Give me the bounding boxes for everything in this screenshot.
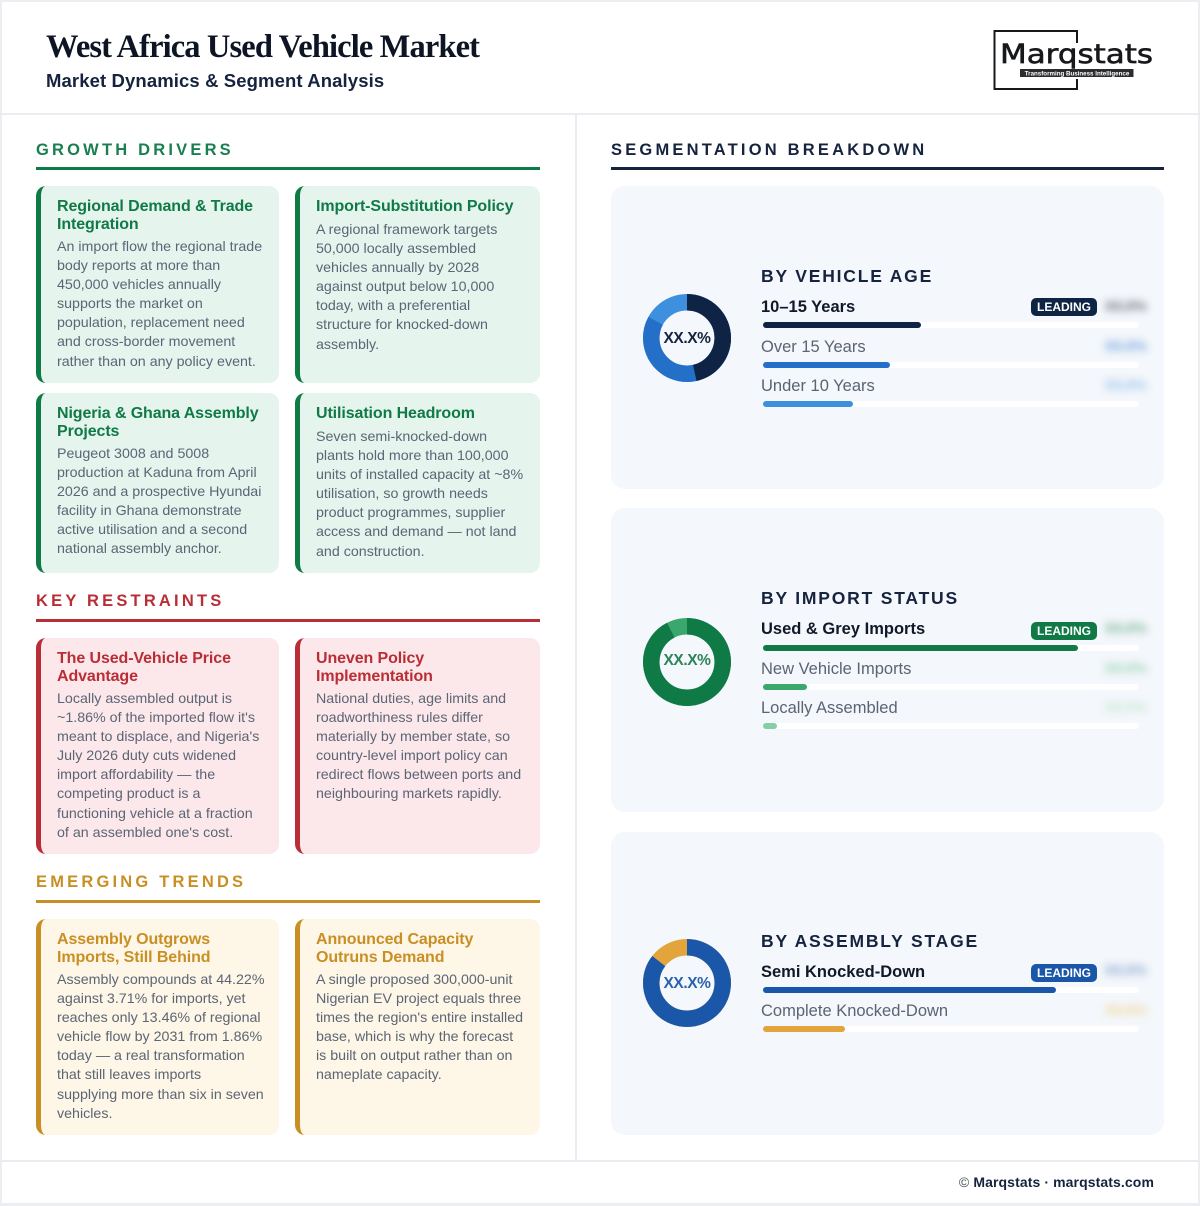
card body: vehicles.	[57, 1106, 112, 1122]
card body	[57, 239, 262, 370]
card body: Locally assembled output is	[57, 691, 232, 707]
card body: and construction.	[316, 544, 425, 560]
donut chart: assembly stage	[643, 939, 731, 1027]
card heading: Import-Substitution Policy	[316, 198, 513, 215]
card body: A regional framework targets	[316, 222, 497, 238]
card body: import affordability — the	[57, 767, 215, 783]
card body: functioning vehicle at a fraction	[57, 806, 253, 822]
bar	[763, 723, 1139, 729]
leading badge: LEADING	[1037, 300, 1091, 314]
card: utilisation headroom	[295, 393, 540, 573]
card body: An import flow the regional trade	[57, 239, 262, 255]
card body: national assembly anchor.	[57, 541, 222, 557]
panel: by import status	[611, 508, 1164, 812]
blurred value: XX.X%	[1104, 620, 1146, 637]
card body: against output below 10,000	[316, 279, 494, 295]
leading badge	[1031, 622, 1097, 640]
logo: Marqstats: Transforming Business Intelligence	[1025, 70, 1130, 77]
card body: meant to displace, and Nigeria's	[57, 729, 259, 745]
card heading: Regional Demand & Trade	[57, 198, 253, 215]
card body: 2026 and a prospective Hyundai	[57, 484, 261, 500]
panel: by vehicle age	[611, 186, 1164, 489]
card body	[316, 691, 521, 802]
card heading: Integration	[57, 216, 139, 232]
panel: by assembly stage	[611, 832, 1164, 1135]
row label: Complete Knocked-Down	[761, 1002, 948, 1020]
leading badge: LEADING	[1037, 624, 1091, 638]
card heading: Imports, Still Behind	[57, 948, 210, 966]
card heading: Announced Capacity	[316, 931, 473, 948]
card body: Peugeot 3008 and 5008	[57, 446, 209, 462]
card body: body reports at more than	[57, 258, 220, 274]
bar	[763, 362, 1139, 368]
blurred value: XX.X%	[1104, 298, 1146, 315]
card body: supports the market on	[57, 296, 203, 312]
leading badge: LEADING	[1037, 966, 1091, 980]
card body: A single proposed 300,000-unit	[316, 972, 512, 988]
blurred value: XX.X%	[1104, 1002, 1146, 1019]
card heading: Utilisation Headroom	[316, 405, 475, 422]
card: assembly outgrows	[36, 919, 279, 1135]
bar	[763, 401, 1139, 407]
logo: Marqstats	[994, 30, 1153, 90]
card body	[57, 972, 265, 1122]
logo: Marqstats: Marqstats	[1000, 39, 1153, 70]
donut chart: assembly stage: XX.X%	[663, 975, 711, 992]
card body: rather than on any policy event.	[57, 354, 256, 370]
card body: against 3.71% for imports, yet	[57, 991, 246, 1007]
card body	[57, 446, 261, 557]
donut chart: vehicle age	[643, 294, 731, 382]
card: regional demand	[36, 186, 279, 383]
header title block	[46, 29, 480, 91]
card body: Seven semi-knocked-down	[316, 429, 487, 445]
leading badge	[1031, 298, 1097, 316]
section heading: segmentation breakdown: SEGMENTATION BREAKDOWN	[611, 140, 927, 158]
card body: of an assembled one's cost.	[57, 825, 233, 841]
card body: today — a real transformation	[57, 1048, 245, 1064]
card body: active utilisation and a second	[57, 522, 247, 538]
donut chart: vehicle age: XX.X%	[663, 330, 711, 346]
card body: production at Kaduna from April	[57, 465, 257, 481]
section heading: key restraints: KEY RESTRAINTS	[36, 592, 224, 610]
card body: base, which is why the forecast	[316, 1029, 513, 1045]
bar	[763, 322, 1139, 328]
card body	[57, 691, 259, 841]
bar	[763, 684, 1139, 690]
blurred value: XX.X%	[1104, 338, 1146, 354]
card body	[316, 429, 523, 560]
row label: Semi Knocked-Down	[761, 962, 925, 980]
title: West Africa Used Vehicle Market	[46, 29, 479, 65]
card body: Nigerian EV project equals three	[316, 991, 521, 1007]
card body: is built on output rather than on	[316, 1048, 512, 1064]
panel title: BY VEHICLE AGE	[761, 266, 933, 286]
card: import substitution	[295, 186, 540, 383]
card heading	[57, 931, 210, 966]
card heading: Projects	[57, 422, 119, 440]
card body: ~1.86% of the imported flow it's	[57, 710, 255, 726]
card: uneven policy	[295, 638, 540, 854]
card body: nameplate capacity.	[316, 1067, 442, 1083]
leading badge	[1031, 964, 1097, 982]
card body: structure for knocked-down	[316, 317, 488, 333]
blurred value: XX.X%	[1104, 699, 1146, 716]
card body	[316, 972, 523, 1083]
panel title: BY IMPORT STATUS	[761, 588, 959, 608]
card heading	[316, 931, 474, 966]
card body: vehicle flow by 2031 from 1.86%	[57, 1029, 262, 1045]
footer: © Marqstats · marqstats.com	[959, 1174, 1154, 1190]
card body: neighbouring markets rapidly.	[316, 786, 502, 802]
blurred value: XX.X%	[1104, 962, 1146, 979]
card heading: Nigeria & Ghana Assembly	[57, 405, 259, 422]
card heading: Implementation	[316, 668, 433, 684]
card heading: The Used-Vehicle Price	[57, 650, 231, 667]
card: price advantage	[36, 638, 279, 854]
row label: Used & Grey Imports	[761, 620, 925, 638]
row label: New Vehicle Imports	[761, 660, 911, 678]
card body: units of installed capacity at ~8%	[316, 467, 523, 483]
subtitle: Market Dynamics & Segment Analysis	[46, 70, 384, 91]
card body: that still leaves imports	[57, 1067, 201, 1083]
card body: assembly.	[316, 337, 379, 353]
card heading	[316, 650, 433, 684]
card body: Assembly compounds at 44.22%	[57, 972, 265, 988]
donut chart: import status: XX.X%	[663, 652, 711, 668]
card heading: Assembly Outgrows	[57, 931, 210, 948]
blurred value: XX.X%	[1104, 660, 1146, 676]
card: assembly projects	[36, 393, 279, 573]
card body	[316, 222, 497, 353]
section heading: emerging trends: EMERGING TRENDS	[36, 872, 246, 890]
donut chart: import status	[643, 618, 731, 706]
card heading	[57, 405, 259, 440]
card heading: Outruns Demand	[316, 948, 444, 966]
card body: roadworthiness rules differ	[316, 710, 483, 726]
card body: and cross-border movement	[57, 334, 235, 350]
row label: Over 15 Years	[761, 338, 866, 356]
card body: July 2026 duty cuts widened	[57, 748, 236, 764]
card body: redirect flows between ports and	[316, 767, 521, 783]
card body: times the region's entire installed	[316, 1010, 523, 1026]
card heading: Advantage	[57, 668, 138, 684]
card: announced capacity	[295, 919, 540, 1135]
card body: 450,000 vehicles annually	[57, 277, 221, 293]
panel title: BY ASSEMBLY STAGE	[761, 931, 979, 951]
card body: reaches only 13.46% of regional	[57, 1010, 261, 1026]
card body: competing product is a	[57, 786, 200, 802]
card heading	[57, 198, 253, 232]
card body: 50,000 locally assembled	[316, 241, 476, 257]
card body: vehicles annually by 2028	[316, 260, 479, 276]
bar	[763, 644, 1139, 650]
card body: today, with a preferential	[316, 298, 470, 314]
card heading	[57, 650, 231, 684]
card body: utilisation, so growth needs	[316, 486, 488, 502]
card body: supplying more than six in seven	[57, 1087, 264, 1103]
bar	[763, 1026, 1139, 1032]
card body: materially by member state, so	[316, 729, 510, 745]
row label: 10–15 Years	[761, 298, 855, 316]
card heading: Uneven Policy	[316, 650, 424, 667]
blurred value: XX.X%	[1104, 377, 1146, 394]
card body: population, replacement need	[57, 315, 245, 331]
card body: product programmes, supplier	[316, 505, 505, 521]
card body: access and demand — not land	[316, 524, 516, 540]
section heading: growth drivers: GROWTH DRIVERS	[36, 140, 234, 158]
card body: country-level import policy can	[316, 748, 508, 764]
card body: facility in Ghana demonstrate	[57, 503, 242, 519]
card body: National duties, age limits and	[316, 691, 506, 707]
bar	[763, 986, 1139, 992]
row label: Under 10 Years	[761, 377, 875, 395]
row label: Locally Assembled	[761, 699, 898, 717]
card body: plants hold more than 100,000	[316, 448, 509, 464]
